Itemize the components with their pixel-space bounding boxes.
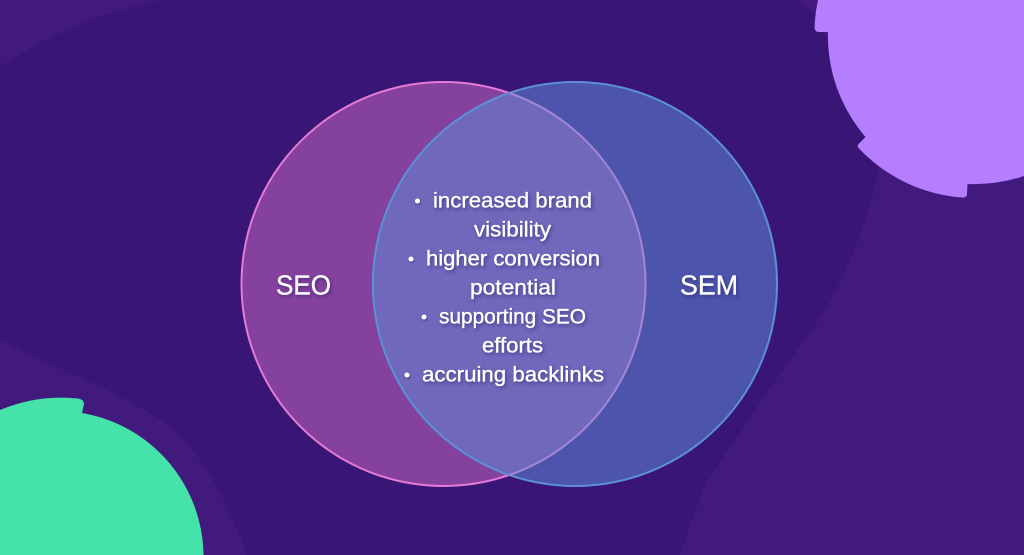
circle: SEO (242, 82, 646, 486)
bullet: higher conversion potential: higher conversion (426, 248, 600, 270)
venn diagram (242, 82, 777, 486)
bullet: increased brand visibility: increased brand (433, 190, 592, 212)
bullet: higher conversion potential: potential (470, 276, 556, 300)
blob: purple top right (814, 0, 1024, 198)
background shape: right (680, 0, 1024, 555)
blob: green bottom left (0, 398, 204, 555)
bullet: supporting SEO efforts (422, 306, 586, 358)
overlap region (373, 93, 646, 475)
overlap left arc (373, 93, 509, 475)
label: SEO: SEO (276, 270, 331, 300)
shared benefits list (404, 190, 604, 386)
bullet: increased brand visibility: visibility (474, 218, 552, 242)
bullet: higher conversion potential (408, 248, 600, 300)
overlap right arc (509, 93, 646, 475)
circle: SEM (373, 82, 777, 486)
label: SEM: SEM (680, 270, 738, 300)
bullet: supporting SEO efforts: efforts (482, 334, 543, 358)
background shape: top left (0, 0, 160, 67)
bullet: increased brand visibility (415, 190, 592, 242)
bullet: accruing backlinks: accruing backlinks (422, 364, 604, 386)
bullet: supporting SEO efforts: supporting SEO (439, 306, 586, 328)
background shape: bottom left (0, 341, 247, 555)
